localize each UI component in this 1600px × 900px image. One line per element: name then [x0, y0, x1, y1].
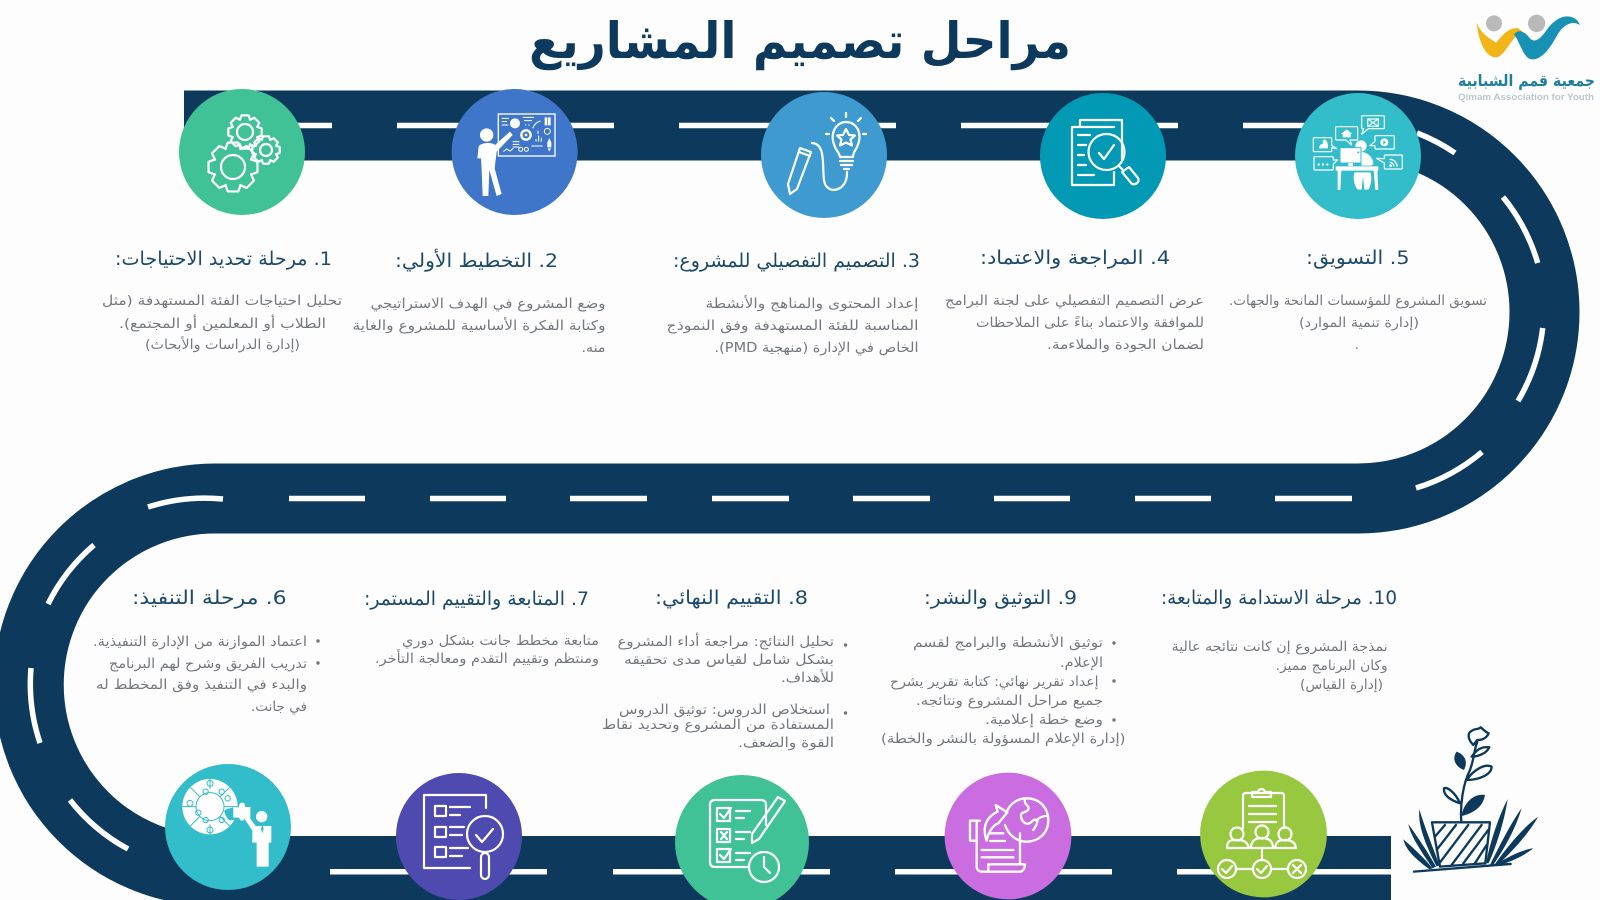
body text: [102, 293, 342, 353]
body text: وضع المشروع في الهدف الاستراتيجي: [370, 296, 606, 312]
bullet list: الإعلام.: [1060, 655, 1103, 671]
body text: الخاص في الإدارة (منهجية PMD).: [714, 340, 918, 356]
body text: تحليل احتياجات الفئة المستهدفة (مثل: [102, 293, 342, 309]
bullet list: [602, 632, 847, 751]
bullet list: جميع مراحل المشروع ونتائجه.: [916, 693, 1103, 709]
body text: إعداد المحتوى والمناهج والأنشطة: [706, 295, 918, 312]
panel: stage 3 detailed design: [666, 92, 920, 356]
logo: Qimam Association for Youth: [1458, 15, 1595, 103]
title: مراحل تصميم المشاريع: [529, 12, 1071, 71]
body text: نمذجة المشروع إن كانت نتائجه عالية: [1172, 639, 1388, 655]
heading: 7. المتابعة والتقييم المستمر:: [364, 588, 589, 610]
body text: وكتابة الفكرة الأساسية للمشروع والغاية: [352, 317, 606, 334]
bullet list: للأهداف.: [781, 669, 834, 686]
icon: puzzle globe and person: [165, 764, 291, 890]
heading: 2. التخطيط الأولي:: [395, 249, 558, 272]
body text: عرض التصميم التفصيلي على لجنة البرامج: [945, 293, 1204, 309]
panel: stage 2 initial planning: [352, 89, 606, 356]
panel: stage 4 review and approval: [945, 93, 1204, 353]
icon: checklist with magnifier: [396, 773, 522, 900]
bullet list: بشكل شامل لقياس مدى تحقيقه: [624, 652, 834, 668]
body text: المناسبة للفئة المستهدفة وفق النموذج: [666, 318, 918, 334]
heading: 10. مرحلة الاستدامة والمتابعة:: [1161, 587, 1397, 609]
heading: 3. التصميم التفصيلي للمشروع:: [673, 250, 920, 272]
panel: stage 6 implementation: [93, 587, 320, 890]
bullet list: تحليل النتائج: مراجعة أداء المشروع: [618, 632, 834, 650]
body text: [1172, 639, 1388, 693]
icon: globe and scroll: [945, 773, 1071, 899]
body text: تسويق المشروع للمؤسسات المانحة والجهات.: [1229, 293, 1487, 309]
body text: (إدارة تنمية الموارد): [1299, 315, 1419, 331]
body text: لضمان الجودة والملاءمة.: [1047, 337, 1204, 353]
panel: stage 9 documentation and publishing: [881, 587, 1126, 899]
icon: presenter at board: [452, 89, 578, 215]
bullet list: (إدارة الإعلام المسؤولة بالنشر والخطة): [881, 731, 1126, 747]
panel: stage 1 needs assessment: [102, 89, 342, 353]
body text: (إدارة القياس): [1300, 677, 1383, 693]
panel: stage 5 marketing: [1229, 93, 1487, 353]
heading: 5. التسويق:: [1306, 247, 1410, 269]
body text: للموافقة والاعتماد بناءً على الملاحظات: [976, 315, 1204, 331]
icon: clipboard, team and decision nodes: [1200, 771, 1327, 897]
heading: 8. التقييم النهائي:: [655, 587, 808, 609]
body text: وكان البرنامج مميز.: [1276, 658, 1388, 674]
icon: person at desk with message bubbles: [1295, 93, 1421, 219]
body text: [1229, 293, 1487, 353]
bullet list: [881, 634, 1126, 747]
icon: gears: [179, 89, 305, 215]
heading: 1. مرحلة تحديد الاحتياجات:: [115, 248, 332, 270]
logo: Qimam Association for Youth: Qimam Association for Youth: [1458, 92, 1594, 103]
bullet list: في جانت.: [251, 699, 307, 715]
body text: .: [1355, 337, 1359, 353]
bullet list: إعداد تقرير نهائي: كتابة تقرير يشرح: [890, 674, 1099, 690]
body text: منه.: [582, 340, 606, 356]
body text: [945, 293, 1204, 353]
panel: stage 10 sustainability: [1161, 587, 1397, 897]
road centre dashes: [30, 126, 1543, 872]
body text: الطلاب أو المعلمين أو المجتمع).: [119, 314, 326, 332]
body text: متابعة مخطط جانت بشكل دوري: [402, 633, 599, 649]
body text: [666, 295, 918, 356]
icon: pencil and light bulb: [761, 92, 887, 218]
illustration: potted plant: [1403, 727, 1538, 872]
bullet list: القوة والضعف.: [738, 735, 834, 751]
body text: [352, 296, 606, 356]
body text: (إدارة الدراسات والأبحاث): [145, 336, 300, 353]
bullet list: المستفادة من المشروع وتحديد نقاط: [602, 717, 834, 733]
heading: 4. المراجعة والاعتماد:: [980, 247, 1170, 269]
bullet list: توثيق الأنشطة والبرامج لقسم: [913, 634, 1103, 651]
bullet list: اعتماد الموازنة من الإدارة التنفيذية.: [93, 634, 307, 650]
bullet list: وضع خطة إعلامية.: [985, 712, 1103, 728]
road: [29, 126, 1545, 871]
panel: stage 8 final evaluation: [602, 587, 847, 900]
panel: stage 7 monitoring: [364, 588, 599, 900]
bullet list: استخلاص الدروس: توثيق الدروس: [619, 702, 830, 718]
bullet list: [93, 634, 320, 715]
bullet list: تدريب الفريق وشرح لهم البرنامج: [109, 656, 307, 672]
heading: 9. التوثيق والنشر:: [924, 587, 1077, 609]
bullet list: والبدء في التنفيذ وفق المخطط له: [96, 677, 307, 693]
heading: 6. مرحلة التنفيذ:: [132, 587, 287, 609]
body text: ومنتظم وتقييم التقدم ومعالجة التأخر.: [375, 649, 599, 667]
body text: [375, 633, 599, 667]
icon: document with magnifier: [1040, 93, 1166, 219]
icon: checklist, pencil and clock: [675, 775, 809, 900]
